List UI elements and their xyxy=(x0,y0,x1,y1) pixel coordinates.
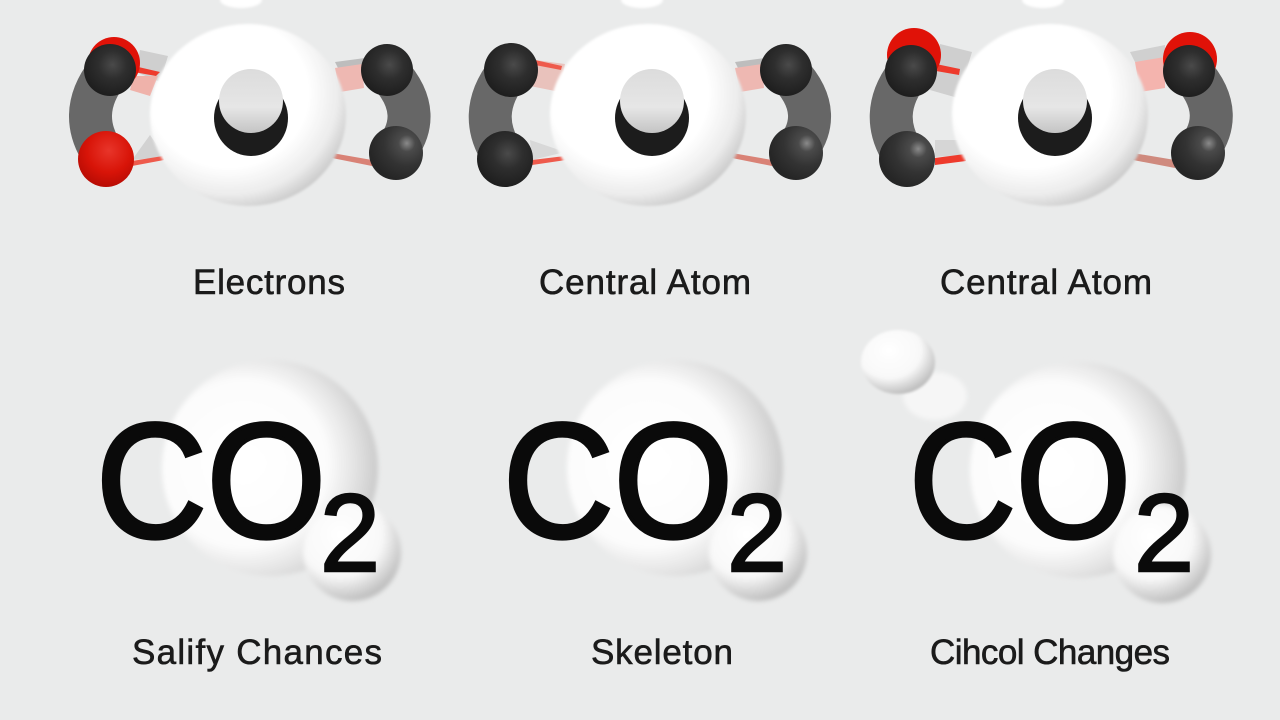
CO2 symbol left xyxy=(96,360,401,601)
CO2 symbol left: 2 xyxy=(320,472,380,595)
label: central atom middle: Central Atom xyxy=(539,263,751,302)
label: cihcol changes: Cihcol Changes xyxy=(930,633,1170,672)
CO2 symbol right: CO xyxy=(909,389,1131,572)
CO2 symbol middle: 2 xyxy=(727,472,787,595)
molecule: central atom with oxygen xyxy=(879,0,1225,206)
CO2 symbol middle xyxy=(503,360,807,601)
CO2 symbol middle: CO xyxy=(503,389,733,572)
molecule: electrons xyxy=(78,0,423,206)
CO2 symbol right xyxy=(861,330,1211,603)
label: central atom right: Central Atom xyxy=(940,263,1152,302)
label: electrons: Electrons xyxy=(193,263,345,302)
molecule: central atom xyxy=(477,0,823,206)
CO2 symbol right: 2 xyxy=(1134,472,1194,595)
CO2 symbol left: CO xyxy=(96,389,326,572)
label: salify chances: Salify Chances xyxy=(132,633,382,672)
label: skeleton: Skeleton xyxy=(591,633,733,672)
